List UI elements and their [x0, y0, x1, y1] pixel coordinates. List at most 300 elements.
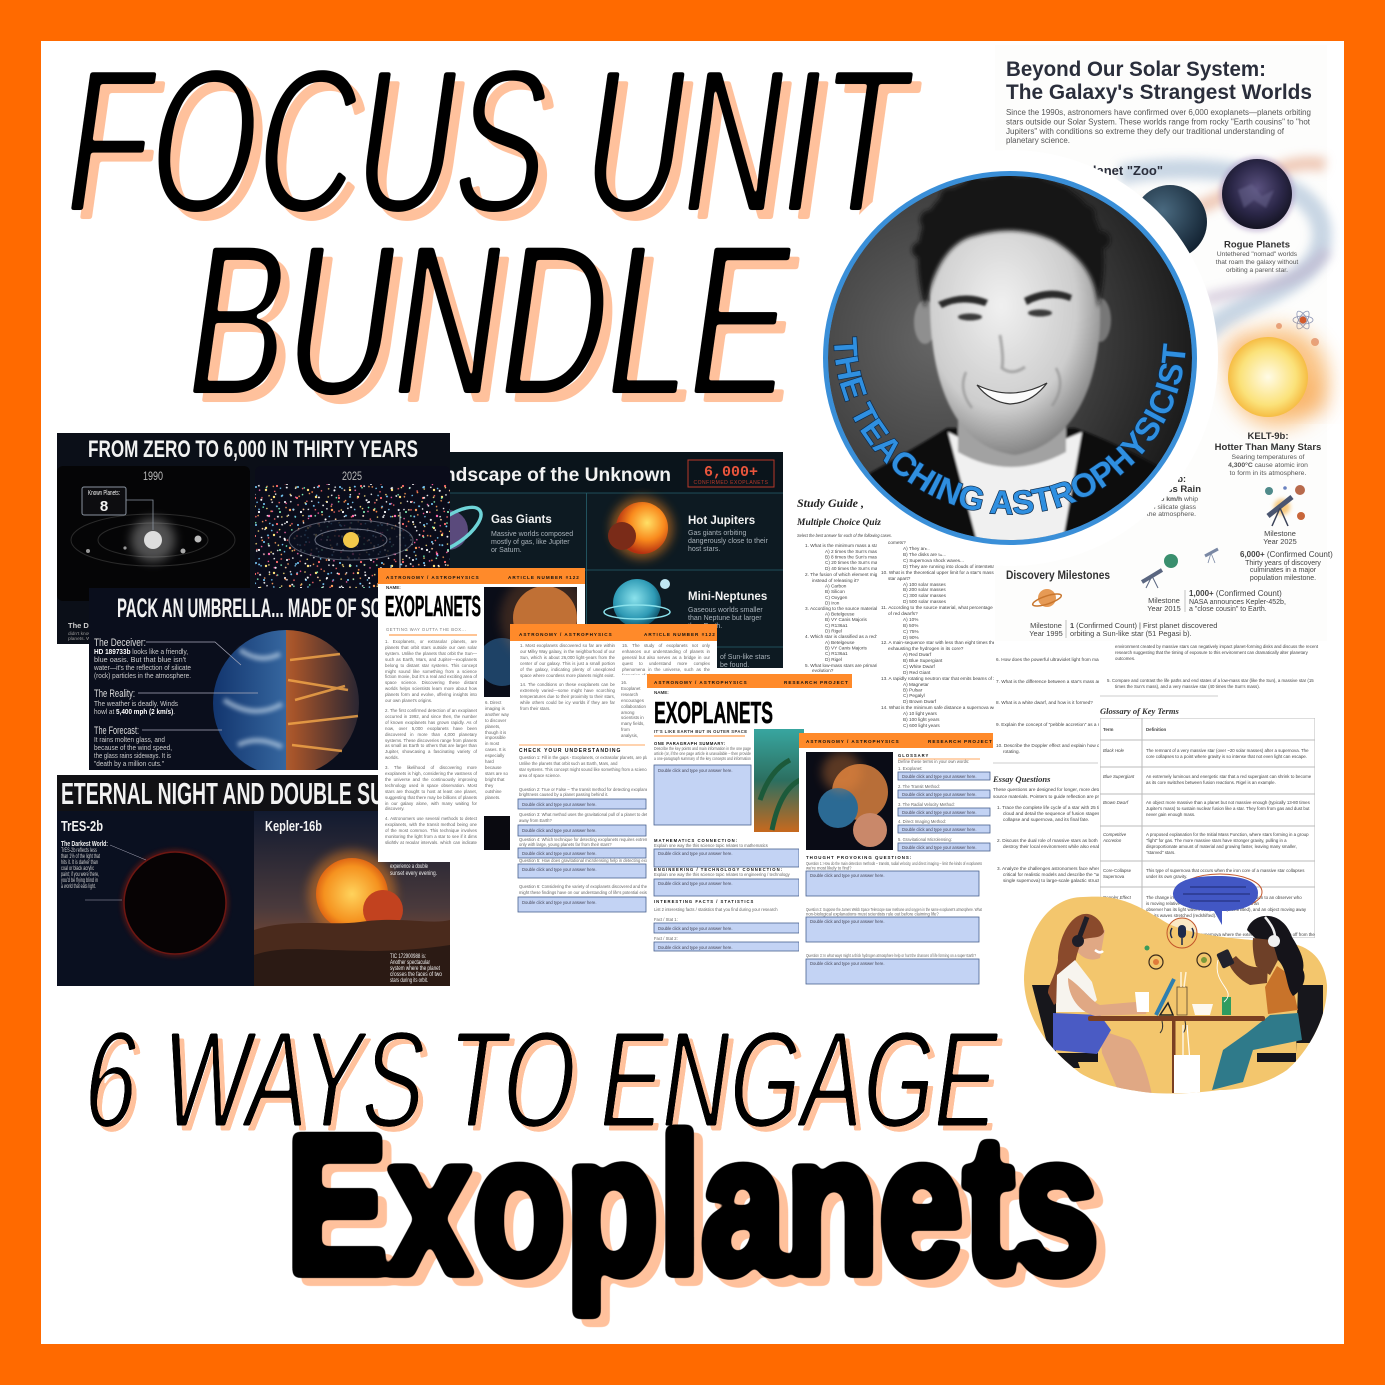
quiz column 1: D) Iron	[825, 600, 840, 606]
question 5 and answer box: Double click and type your answer here.	[522, 867, 596, 872]
quiz column 2: C) 300 solar masses	[903, 593, 947, 598]
glossary section: 3. The Radial Velocity Method:	[898, 802, 955, 807]
document: research project page 2	[799, 733, 993, 985]
reality text: The Reality:	[94, 688, 135, 700]
milestone 2025: culminates in a major	[1250, 567, 1317, 574]
article text columns: 1. Most exoplanets discovered so far are within our Milky Way galaxy, in the neighborhood of our Sun, which is about 26,000 light-years from the center of our galaxy. This is just a small portion of the galaxy, indicating plenty of unexplored space where countless more planets might exist.	[520, 643, 615, 678]
question 1: star systems. This concept might sound like something from a science	[519, 767, 649, 772]
portrait: white halo	[802, 150, 1218, 566]
illustration: planets	[806, 752, 893, 850]
quiz column 1: evolution?	[812, 668, 834, 673]
illustration: dark planet	[85, 845, 229, 957]
double sunset text: experience a double	[390, 863, 428, 870]
article body column	[385, 639, 477, 844]
known planets callout: 8	[100, 498, 108, 515]
glossary table	[1100, 718, 1315, 938]
question 1: Question 1: Fill in the gaps - Exoplanets, or extrasolar planets, are planets t	[519, 755, 659, 760]
darkest world text: coal or black acrylic	[61, 865, 94, 872]
orange header band: ASTRONOMY / ASTROPHYSICS	[386, 575, 480, 580]
deceiver text: (rock) particles in the atmosphere.	[94, 671, 191, 680]
portrait: The Teaching Astrophysicist	[823, 171, 1197, 545]
mini-Neptunes text: Gaseous worlds smaller	[688, 607, 763, 614]
glossary table: never gain enough mass.	[1146, 812, 1195, 817]
left woman body	[1048, 914, 1152, 1095]
question 1: Unlike the planets that orbit such as Earth, Mars, and	[519, 761, 618, 766]
title: Focus Unit: FOCUS UNIT	[62, 35, 932, 265]
quiz column 1: 4. Which star is classified as a red?	[805, 634, 879, 639]
mini-Neptunes text: Mini-Neptunes	[688, 591, 767, 603]
essay questions: collapse and supernova, and its final fate.	[1003, 817, 1089, 822]
discovery milestones heading: Discovery Milestones	[1006, 568, 1110, 582]
quiz column 2: D) 90%	[903, 635, 919, 640]
quiz column 1: D) 40 times the Sun's mass	[825, 566, 883, 571]
TIC system text: stars during its orbit.	[390, 977, 428, 984]
forecast text: because of the wind speed,	[94, 743, 172, 752]
slide heading: FROM ZERO TO 6,000 IN THIRTY YEARS	[88, 436, 418, 463]
question 1: area of space science.	[519, 773, 561, 778]
short answer questions: 8. What is a white dwarf, and how is it formed?	[996, 700, 1093, 705]
quiz column 1: C) 20 times the Sun's mass	[825, 560, 883, 565]
question 6 and answer box: Question 6: Considering the variety of exoplanets discovered and their dis	[519, 884, 656, 889]
slide heading: Landscape of the Unknown	[422, 465, 671, 486]
document: exoplanets article page 1	[378, 568, 590, 862]
milestone 2015	[1147, 589, 1286, 613]
essay continuation: 5. Compare and contrast the life paths and end states of a low-mass star (like the Sun), a massive star (15	[1107, 678, 1314, 683]
milestone 1995: 1 (Confirmed Count) | First planet discovered	[1070, 621, 1217, 630]
essay questions: Essay Questions	[992, 774, 1051, 784]
quiz column 2: B) Pulsar	[903, 688, 923, 692]
forecast text	[94, 725, 172, 768]
illustration: Kepler-16b double suns	[254, 850, 450, 986]
glass rain text: through the atmosphere.	[1122, 511, 1196, 518]
quiz column 2: of red dwarfs?	[888, 611, 918, 616]
quiz column 2: B) Blue Supergiant	[903, 658, 943, 663]
quiz column 2: 11. According to the source material, what percentage of	[881, 605, 999, 610]
glossary table: Jupiter's mass) to sustain nuclear fusion like a star. They form from gas and dust but	[1146, 806, 1310, 811]
darkest world text: a world that eats light.	[61, 883, 96, 890]
thought provoking questions: Question 2: Suppose the James Webb Space Telescope saw methane and oxygen in the same exoplanet's atmosphere. What	[806, 907, 983, 912]
milestone 1995: Milestone	[1030, 621, 1062, 630]
deceiver text: water—it's the reflection of silicate	[93, 663, 191, 672]
right woman head	[1216, 916, 1305, 996]
glossary table: "fight" for gas. The more massive stars have stronger gravity, pulling in a	[1146, 838, 1287, 843]
essay continuation: times the Sun's mass), and a very massive star (40 times the Sun's mass).	[1115, 684, 1260, 689]
quiz column 1: B) VY Canis Majoris	[825, 646, 868, 650]
question 4 and answer box: Question 4: Which technique for detecting exoplanets requires extremely s	[519, 837, 657, 842]
quiz column 1: A) 2 times the Sun's mass	[825, 549, 880, 554]
document: glossary of key terms	[1099, 640, 1325, 940]
quiz instructions: Select the best answer for each of the following cases.	[797, 533, 892, 538]
question 3 and answer box: away from Earth?	[519, 818, 552, 823]
interesting facts: INTERESTING FACTS / STATISTICS	[654, 899, 754, 904]
short answer questions: 7. What is the difference between a star's mass an	[996, 679, 1101, 684]
circular name text: THE TEACHING ASTROPHYSICIST	[834, 336, 1186, 515]
mini-Neptunes text	[688, 591, 767, 630]
quiz column 2: D) Brown Dwarf	[903, 699, 937, 704]
yellow blob background	[1024, 897, 1327, 1094]
glass rain text: Sideways Glass Rain	[1106, 484, 1201, 495]
glossary table: is moving relative to the source (object moving towards an	[1146, 901, 1260, 906]
glossary table: An object more massive than a planet but not massive enough (typically 13-80 times	[1146, 800, 1311, 805]
glossary section: 2. The Transit Method:	[898, 784, 940, 789]
name label: NAME:	[386, 585, 401, 590]
short answer questions: rotating.	[1003, 749, 1020, 754]
document: research project page 1	[647, 674, 852, 955]
name label: NAME:	[654, 690, 669, 695]
essay questions: These questions are designed for longer, more detailed	[993, 787, 1108, 792]
panel: 2025 solar system: 2025	[342, 469, 362, 483]
right woman body	[1212, 956, 1302, 1090]
article text columns	[520, 643, 615, 735]
TIC system text: Another spectacular	[390, 959, 430, 966]
footnote: the dawn text: The Dawn	[68, 621, 104, 630]
table items	[1135, 972, 1231, 1015]
essay questions: single supernova) to large-scale galactic structu	[1003, 878, 1102, 883]
gas giants text	[491, 514, 573, 554]
mathematics connection: Explain one way the this science topic relates to mathematics	[654, 843, 768, 848]
thought provoking questions: THOUGHT PROVOKING QUESTIONS:	[806, 855, 912, 860]
essay questions: 1. Trace the complete life cycle of a star with 25 tim	[997, 805, 1103, 810]
orange header band	[799, 733, 993, 748]
deceiver text: blue oasis. But that blue isn't	[94, 655, 187, 664]
rogue planets text: Untethered "nomad" worlds	[1217, 251, 1298, 258]
left chair	[1032, 985, 1098, 1068]
one paragraph summary: Describe the key points and main information in the one page	[654, 746, 752, 751]
KELT-9b text: Hotter Than Many Stars	[1215, 442, 1321, 453]
photo of presenter	[820, 170, 1210, 560]
gas giants text: Gas Giants	[491, 514, 552, 526]
gas giants text: Massive worlds composed	[491, 531, 573, 538]
glossary heading: Glossary of Key Terms	[1100, 706, 1179, 716]
question 2 and answer box	[518, 787, 655, 809]
infographic intro	[1006, 107, 1311, 145]
quiz column 1: A) Betelgeuse	[825, 640, 855, 645]
quiz column 2: C) Supernova shock waves...	[903, 558, 964, 563]
quiz column 2	[881, 540, 1003, 728]
glossary table: This type of supernova that occurs when the iron core of a massive star collapses	[1146, 868, 1305, 873]
one paragraph summary: Double click and type your answer here.	[658, 768, 732, 773]
KELT-9b text: to form in its atmosphere.	[1230, 470, 1306, 477]
icon: earth-like planet	[1133, 185, 1207, 259]
gas giants text: mostly of gas, like Jupiter	[491, 539, 570, 546]
essay questions: cloud and detail the sequence of fusion stages it	[1003, 811, 1104, 816]
speech bubble	[1173, 874, 1262, 925]
thought provoking questions: non-biological explanations must scientists rule out before claiming life?	[806, 912, 939, 916]
document: study guide quiz	[796, 499, 1099, 883]
glossary table: Accretion	[1102, 838, 1122, 843]
tagline: 6 Ways to Engage	[76, 1003, 1013, 1162]
one paragraph summary: ONE PARAGRAPH SUMMARY:	[654, 741, 726, 746]
glossary section	[898, 753, 990, 851]
quiz column 1: C) R136a1	[825, 651, 848, 656]
darkest world text: TrES-2b reflects less	[61, 847, 97, 854]
document: exoplanets article page 2	[510, 624, 717, 912]
darkest world text: you'd be flying blind in	[61, 877, 98, 884]
icon: ringed planet	[1031, 589, 1063, 608]
forecast text: It rains molten glass, and	[94, 735, 165, 744]
hot Jupiters text: host stars.	[688, 546, 720, 553]
interesting facts: Fact / Stat 1:	[654, 917, 678, 922]
known planets callout: Known Planets:	[88, 490, 120, 497]
quiz column 2: B) The disks are to...	[903, 552, 946, 557]
thought provoking questions	[806, 855, 983, 984]
glossary section: 5. Gravitational Microlensing:	[898, 837, 952, 842]
question 3 and answer box: Double click and type your answer here.	[522, 828, 596, 833]
darkest world text: hits it. It is darker than	[61, 859, 98, 866]
article body column 2: 6. Direct imaging is another way to discover planets, though it is impossible in most cases. It is especially hard because stars are so bright that they outshine planets.	[485, 700, 509, 800]
quiz column 2: exhausting the hydrogen in its core?	[888, 646, 964, 651]
habitable footnote	[720, 654, 770, 667]
project subtitle: IT'S LIKE EARTH BUT IN OUTER SPACE	[654, 729, 747, 734]
forecast text: The Forecast:	[94, 725, 139, 737]
glossary table: "starved" stars.	[1146, 850, 1175, 855]
essay continuation: research suggesting that the timing of exposure to this environment can dramatically alter planetary	[1115, 650, 1309, 655]
thought provoking questions: Double click and type your answer here.	[810, 919, 884, 924]
quiz column 1: D) Rigel	[825, 657, 842, 662]
panel: 1990 solar system	[57, 466, 250, 601]
title: Bundle: BUNDLE	[182, 209, 816, 451]
quiz column 1: B) 8 times the Sun's mass	[825, 554, 880, 560]
icon: rogue planet	[1219, 156, 1295, 232]
essay questions: source materials. Pointers to guide reflection are provid	[993, 794, 1108, 799]
glossary table: An extremely luminous and energetic star that a red supergiant can shrink to become	[1146, 774, 1312, 779]
glossary table: A proposed explanation for the Initial Mass Function, where stars forming in a group	[1146, 832, 1309, 837]
hot Jupiters text: Gas giants orbiting	[688, 530, 746, 537]
reality text: The weather is deadly. Winds	[94, 699, 178, 708]
icon: telescope and planets	[1265, 485, 1305, 526]
forecast text: "death by a million cuts."	[94, 759, 164, 768]
deceiver text	[93, 637, 191, 680]
glass rain text: molten silicate glass	[1135, 504, 1197, 511]
glossary table: Black Hole	[1103, 748, 1125, 753]
orange header band	[510, 624, 717, 641]
quiz column 2: 10. What is the theoretical upper limit for a star's mass, be	[881, 570, 1002, 575]
question 2 and answer box: brightness caused by a planet passing behind it.	[519, 792, 608, 797]
rogue planets text: that roam the galaxy without	[1216, 259, 1298, 266]
icon: microphone	[1167, 918, 1197, 948]
essay questions: critical for realistic models and describe the "uns	[1003, 872, 1104, 877]
rogue planets text: orbiting a parent star.	[1226, 267, 1288, 274]
quiz column 2: C) 75%	[903, 629, 919, 634]
quiz column 2: D) 500 solar masses	[903, 599, 947, 604]
slide: From Zero to 6,000	[57, 433, 450, 644]
darkest world text	[61, 841, 108, 890]
quiz column 2: 13. A rapidly rotating neutron star that emits beams of X	[881, 676, 997, 681]
title: Exoplanets: Exoplanets	[286, 1094, 1099, 1315]
TIC system text	[390, 953, 442, 984]
table	[1088, 1016, 1265, 1093]
interesting facts: List 2 interesting facts / statistics that you find during your research	[654, 907, 778, 912]
glossary table: A massive star explosion, a supernova where the exterior of a star is blown off from the	[1146, 932, 1315, 937]
question 5 and answer box	[518, 858, 660, 878]
quiz column 2: D) They are running into clouds of interstellar	[903, 564, 997, 569]
essay continuation	[1107, 644, 1319, 689]
one paragraph summary	[654, 741, 752, 825]
orange header band: RESEARCH PROJECT	[928, 739, 993, 744]
section heading: planet zoo: The Exoplanet "Zoo"	[1034, 163, 1163, 178]
glossary table: The change in wavelength or frequency of a wave in relation to an observer who	[1146, 895, 1302, 900]
quiz column 2: D) Red Giant	[903, 670, 931, 675]
essay continuation: outcomes.	[1115, 656, 1135, 661]
quiz column 1: C) Oxygen	[825, 595, 848, 600]
KELT-9b text: Searing temperatures of	[1232, 454, 1305, 461]
thought provoking questions: Question 1: How do the main detection methods – transits, radial velocity, and direct imaging – limit the kinds of exoplanets	[806, 861, 982, 866]
quiz column 1	[805, 544, 877, 672]
hot Jupiters text: dangerously close to their	[688, 538, 768, 545]
quiz column 1: A) Carbon	[825, 584, 847, 588]
milestone 2015: Milestone	[1148, 596, 1180, 605]
question 4 and answer box: only with large, young planets far from their stars?	[519, 842, 612, 847]
essay questions: destroy their local environment while also enabli	[1003, 844, 1103, 849]
thought provoking questions: Double click and type your answer here.	[810, 873, 884, 878]
glossary table: The remnant of a very massive star (over ~20 solar masses) after a supernova. The	[1146, 748, 1309, 753]
essay continuation: environment created by massive stars can negatively impact planet-forming disks and discuss the recent	[1115, 644, 1319, 649]
infographic title	[1006, 58, 1312, 104]
quiz column 2: A) They are...	[903, 546, 931, 551]
glass rain text: Winds of 8,700 km/h whip	[1119, 496, 1198, 503]
glossary section: Double click and type your answer here.	[902, 774, 976, 779]
quiz column 2: B) 50%	[903, 623, 918, 628]
panel: 2025 solar system	[255, 472, 450, 588]
glossary section: Double click and type your answer here.	[902, 810, 976, 815]
KELT-9b text	[1215, 431, 1321, 477]
glossary table: Definition	[1146, 727, 1167, 732]
document: exoplanets article page 1: EXOPLANETS	[385, 591, 481, 623]
swirling background	[1120, 163, 1327, 396]
KELT-9b text: 4,300°C cause atomic iron	[1228, 461, 1308, 469]
engineering connection: Explain one way the this science topic relates to engineering / technology	[654, 872, 791, 877]
quiz column 2: B) 100 light years	[903, 717, 940, 722]
question 6 and answer box: Double click and type your answer here.	[522, 900, 596, 905]
article body column: 2. The first confirmed detection of an exoplanet occurred in 1992, and since then, the number of known exoplanets has grown rapidly. As of now, over 5,000 exoplanets have been discovered in more than 4,000 planetary systems. These discoveries range from planets as small as Earth to others that are larger than Jupiter, showcasing a fascinating variety of worlds.	[385, 708, 477, 760]
glossary table: Competitive	[1103, 832, 1127, 837]
quiz column 2: A) 10%	[903, 617, 918, 622]
quiz column 2: comets?	[888, 540, 906, 545]
small dark image	[484, 816, 510, 850]
interesting facts: Fact / Stat 2:	[654, 936, 678, 941]
short answer questions	[996, 657, 1105, 754]
quiz column 1: 5. What low-mass stars are primarily res	[805, 663, 889, 668]
quiz column 1: B) Silicon	[825, 589, 845, 594]
one paragraph summary: article (or, if the one page article is unavailable – then provide	[654, 751, 752, 756]
project title: EXOPLANETS	[654, 695, 773, 730]
orange header band: RESEARCH PROJECT	[784, 680, 849, 685]
quiz column 1: B) VY Canis Majoris	[825, 617, 868, 622]
icon: hot Jupiter	[608, 497, 673, 559]
milestone 2015: a "close cousin" to Earth.	[1189, 606, 1267, 613]
quiz column 2: C) White Dwarf	[903, 664, 935, 669]
facial features	[938, 291, 1072, 408]
glossary table: Supernova	[1103, 874, 1125, 879]
question 2 and answer box: Question 2: True or False – The transit method for detecting exoplanets r	[519, 787, 655, 792]
footnote: the dawn text	[68, 622, 89, 641]
quiz column 1: 1. What is the minimum mass a star	[805, 543, 880, 548]
infographic title: The Galaxy's Strangest Worlds	[1006, 81, 1312, 104]
study guide heading: Study Guide ,	[797, 496, 864, 510]
infographic intro: Jupiters" with conditions so extreme they defy our traditional understanding of	[1006, 126, 1285, 136]
gas giants text: or Saturn.	[491, 547, 522, 554]
orange header band	[647, 674, 852, 688]
forecast text: the glass rains sideways. It is	[94, 751, 171, 760]
milestone 2015: 1,000+ (Confirmed Count)	[1189, 589, 1282, 598]
glass rain text: HD 189733b:	[1132, 474, 1186, 484]
title: Focus Unit	[53, 26, 932, 265]
reality text	[94, 688, 178, 716]
glossary table: disproportionate amount of material and growing faster, leaving many smaller,	[1146, 844, 1297, 849]
quiz column 1: D) Rigel	[825, 628, 842, 634]
engineering connection	[654, 867, 799, 896]
icon: KELT-9b star	[1228, 327, 1328, 427]
glossary section: Define these terms in your own words:	[898, 759, 969, 764]
quiz column 2: 14. What is the minimum safe distance a supernova would	[881, 705, 1003, 710]
quiz column 1: A) Betelgeuse	[825, 612, 855, 616]
reality text: howl at 5,400 mph (2 km/s).	[94, 707, 175, 716]
infographic intro: Since the 1990s, astronomers have confirmed over 6,000 exoplanets—planets orbiting	[1006, 107, 1311, 117]
illustration: podcast listeners	[1024, 874, 1327, 1095]
glossary table: as its core switches between fusion reactions. Rigel is an example.	[1146, 780, 1276, 785]
slide: Pack an Umbrella	[89, 588, 378, 770]
essay questions: 2. Discuss the dual role of massive stars as both cr	[997, 838, 1103, 843]
quiz column 2: C) Pegalyl	[903, 693, 925, 698]
glossary section: GLOSSARY	[898, 753, 929, 758]
article image	[484, 587, 577, 697]
question 1	[519, 755, 659, 778]
question 4 and answer box	[518, 837, 657, 858]
slide: Landscape of the Unknown	[450, 452, 783, 668]
milestone 1995	[1029, 620, 1217, 638]
essay questions	[992, 774, 1108, 883]
short answer questions: 6. How does the powerful ultraviolet light from mas	[996, 657, 1102, 662]
hair	[912, 170, 1110, 308]
question 6 and answer box: might these findings have on our understanding of life's potential existence	[519, 890, 658, 895]
quiz column 1: 2. The fusion of which element might	[805, 572, 882, 577]
glossary table: under its own gravity.	[1146, 874, 1187, 879]
glossary section: Double click and type your answer here.	[902, 845, 976, 850]
article body column: 1. Exoplanets, or extrasolar planets, are planets that orbit stars outside our own solar system. Unlike the planets that orbit the Sun—such as Earth, Mars, and Jupiter—exoplanets belong to distant star systems. This concept might sound like something from a science fiction movie, but it's a real and exciting area of space science. Discovering these distant worlds helps scientists learn more about how planets form and evolve, offering insights into our own planet's origins.	[385, 639, 477, 703]
thought provoking questions: Double click and type your answer here.	[810, 961, 884, 966]
title: Exoplanets: Exoplanets	[295, 1102, 1108, 1323]
glossary table: has its waves stretched (redshifted).	[1146, 913, 1216, 918]
one paragraph summary: a one-paragraph summary of the key concepts and information	[654, 756, 752, 761]
quiz column 2: star apart?	[888, 576, 911, 581]
milestone 1995: Year 1995	[1029, 629, 1063, 638]
illustration: split planet	[213, 630, 359, 776]
quiz column 2: A) Red Dwarf	[903, 652, 932, 657]
glossary section: Double click and type your answer here.	[902, 827, 976, 832]
quiz heading: Multiple Choice Quiz	[796, 518, 881, 528]
question 2 and answer box: Double click and type your answer here.	[522, 802, 596, 807]
TIC system text: crosses the faces of two	[390, 971, 442, 978]
essay questions: 3. Analyze the challenges astronomers face when	[997, 866, 1101, 871]
glossary table: Blue Supergiant	[1103, 774, 1135, 779]
orange header band: ASTRONOMY / ASTROPHYSICS	[519, 632, 613, 637]
shopping bag	[1174, 1025, 1200, 1093]
stat box	[688, 460, 774, 487]
interesting facts: Double click and type your answer here.	[658, 945, 732, 950]
milestone 1995: orbiting a Sun-like star (51 Pegasi b).	[1070, 629, 1192, 638]
mini-Neptunes text: than Neptune but larger	[688, 615, 762, 622]
darkest world text: The Darkest World:	[61, 841, 108, 848]
quiz column 2: B) 200 solar masses	[903, 587, 946, 592]
glossary section: 1. Exoplanet:	[898, 766, 922, 771]
stat box: 6,000+	[704, 464, 758, 481]
panel: 1990 solar system: 1990	[143, 469, 163, 483]
engineering connection: ENGINEERING / TECHNOLOGY CONNECTION:	[654, 867, 783, 872]
KELT-9b text: KELT-9b:	[1248, 431, 1288, 442]
hot Jupiters text	[688, 515, 768, 553]
interesting facts	[654, 899, 799, 951]
TrES-2b label: TrES-2b	[61, 818, 103, 835]
